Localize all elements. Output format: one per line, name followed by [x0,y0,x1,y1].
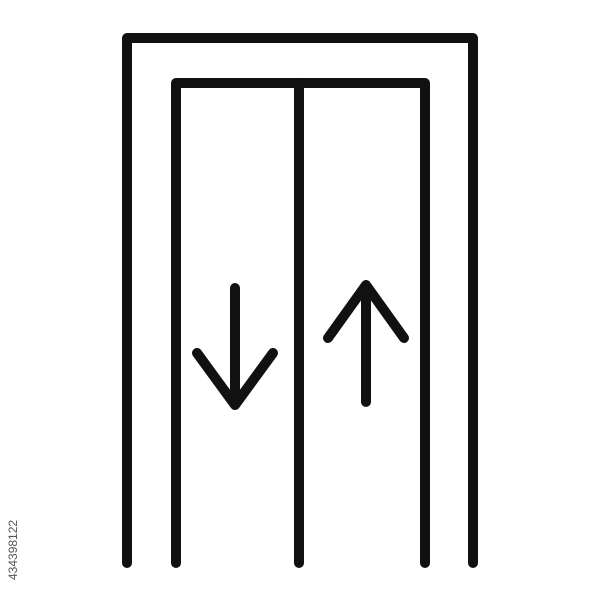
outer frame [127,38,473,563]
stock id text: 434398122 [6,520,20,580]
inner frame [176,83,425,563]
arrow: up [328,285,404,402]
arrow: down [197,288,273,405]
door split line [294,83,304,563]
